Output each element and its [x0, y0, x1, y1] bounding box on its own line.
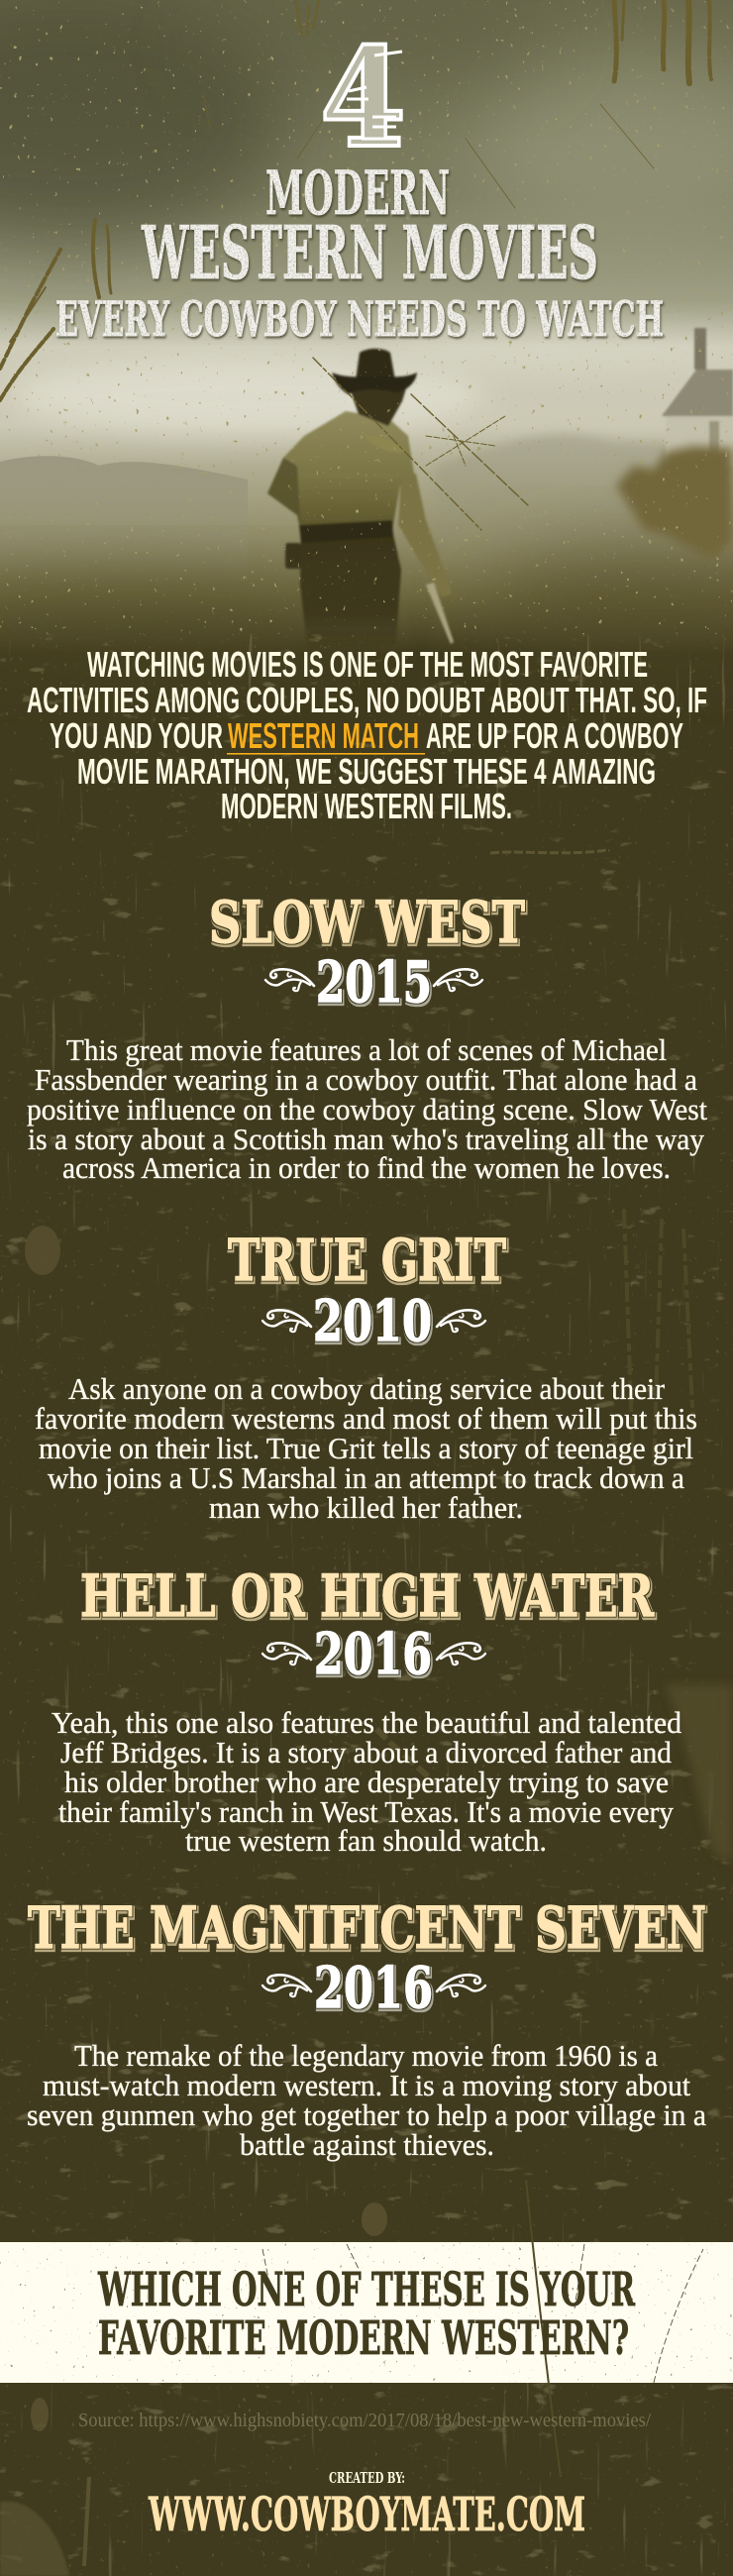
icon: left flourish — [262, 1310, 311, 1332]
heading: TRUE GRIT — [228, 1227, 506, 1294]
description: seven gunmen who get together to help a poor village in a — [27, 2097, 706, 2132]
source: Source: https://www.highsnobiety.com/2017/08/18/best-new-western-movies/ — [78, 2410, 651, 2431]
icon: left flourish — [262, 1643, 311, 1664]
description: his older brother who are desperately trying to save — [64, 1765, 669, 1799]
text block: intro — [27, 644, 707, 826]
hat brim — [332, 373, 417, 394]
legs — [300, 521, 401, 654]
grunge splatter on hero — [0, 0, 733, 634]
description: Jeff Bridges. It is a story about a divorced father and — [60, 1735, 672, 1770]
icon: left flourish — [262, 1975, 311, 1996]
description: is a story about a Scottish man who's traveling all the way — [28, 1122, 704, 1156]
hat crown — [356, 349, 395, 380]
panel: hell or high water — [52, 1562, 681, 1858]
description: their family's ranch in West Texas. It's a movie every — [58, 1794, 674, 1829]
icon: right flourish — [437, 1310, 485, 1332]
description: Fassbender wearing in a cowboy outfit. That alone had a — [35, 1062, 697, 1097]
description: must-watch modern western. It is a moving story about — [43, 2068, 690, 2102]
description: true western fan should watch. — [185, 1823, 547, 1858]
panel: question banner — [0, 2180, 733, 2477]
knife — [426, 583, 454, 644]
description: positive influence on the cowboy dating scene. Slow West — [27, 1092, 707, 1127]
year: 2015 — [316, 949, 432, 1016]
description: The remake of the legendary movie from 1960 is a — [74, 2038, 658, 2073]
description — [52, 1705, 681, 1858]
description: favorite modern westerns and most of them will put this — [35, 1401, 697, 1436]
icon: right flourish — [437, 1975, 485, 1996]
panel: the magnificent seven — [27, 1894, 706, 2162]
icon: cowboy figure — [267, 349, 454, 654]
description — [27, 1032, 707, 1185]
panel: slow west — [27, 889, 707, 1185]
panel: hero photo — [0, 0, 733, 674]
text block: intro: WESTERN MATCH — [228, 715, 419, 756]
panel: true grit — [35, 1227, 697, 1525]
icon: right flourish — [437, 1643, 485, 1664]
description: battle against thieves. — [240, 2127, 494, 2162]
shirt blotch — [361, 434, 406, 453]
neck and hair — [350, 388, 406, 426]
grunge texture over dark section — [0, 634, 733, 2576]
year: 2010 — [313, 1288, 432, 1354]
house — [662, 328, 733, 466]
title: modern: MODERN — [265, 159, 450, 229]
hills — [0, 456, 248, 585]
description — [35, 1371, 697, 1525]
title: number 4: 4 — [320, 17, 406, 178]
description: across America in order to find the women he loves. — [62, 1150, 671, 1185]
year: 2016 — [314, 1621, 432, 1687]
description: movie on their list. True Grit tells a story of teenage girl — [39, 1431, 693, 1465]
shirt — [267, 411, 414, 533]
description — [27, 2038, 706, 2162]
belt — [299, 520, 393, 543]
right arm — [398, 474, 452, 596]
text block: intro: YOU AND YOUR — [50, 715, 223, 756]
created by label: CREATED BY: — [329, 2469, 405, 2487]
bush — [616, 446, 733, 560]
description: who joins a U.S Marshal in an attempt to track down a — [48, 1460, 684, 1495]
heading: SLOW WEST — [209, 889, 525, 956]
description: Yeah, this one also features the beautiful and talented — [52, 1705, 681, 1740]
description: This great movie features a lot of scenes of Michael — [66, 1032, 667, 1067]
icon: left flourish — [265, 969, 314, 991]
text block: intro: MODERN WESTERN FILMS. — [221, 786, 512, 826]
icon: right flourish — [434, 969, 482, 991]
description: man who killed her father. — [209, 1490, 523, 1525]
year: 2016 — [314, 1955, 433, 2021]
description: Ask anyone on a cowboy dating service about their — [68, 1371, 666, 1406]
shirt shadow — [267, 458, 301, 533]
